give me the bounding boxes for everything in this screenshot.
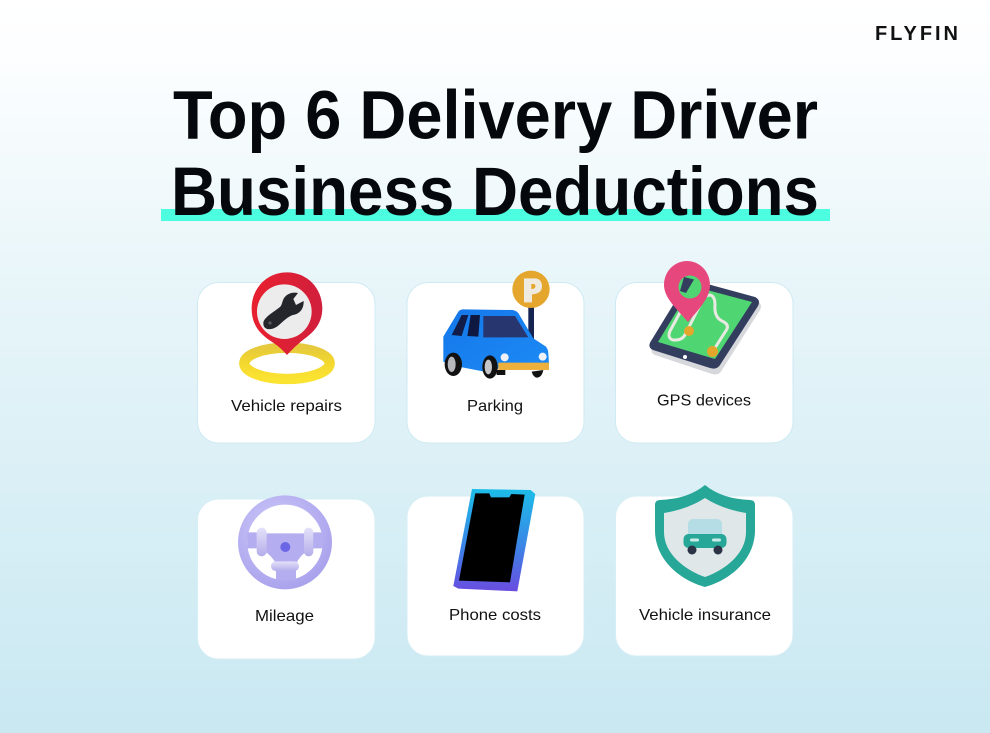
icon: smartphone — [453, 489, 535, 591]
icon: shield with car — [655, 485, 755, 587]
logo: FLYFIN: FLYFIN — [875, 23, 958, 45]
label: Parking — [467, 398, 523, 415]
title: Business Deductions — [171, 153, 819, 230]
panel: mileage — [198, 499, 375, 659]
panel: vehicle repairs — [198, 272, 375, 443]
title — [171, 76, 819, 230]
icon: wrench location pin on ring — [244, 272, 330, 379]
label: Phone costs — [449, 607, 541, 624]
panel: vehicle insurance — [616, 485, 793, 656]
icon: steering wheel — [243, 500, 327, 585]
panel: phone costs — [407, 489, 584, 656]
label: GPS devices — [657, 392, 751, 410]
label: Vehicle insurance — [639, 607, 771, 624]
label: Mileage — [255, 608, 314, 625]
icon: blue car with parking sign — [443, 271, 550, 379]
label: Vehicle repairs — [231, 398, 342, 415]
title highlight underline — [161, 209, 830, 221]
title: Top 6 Delivery Driver — [173, 76, 818, 154]
icon: tablet map with pink pin — [649, 261, 761, 374]
panel: GPS devices — [616, 261, 793, 443]
panel: parking — [407, 271, 584, 443]
